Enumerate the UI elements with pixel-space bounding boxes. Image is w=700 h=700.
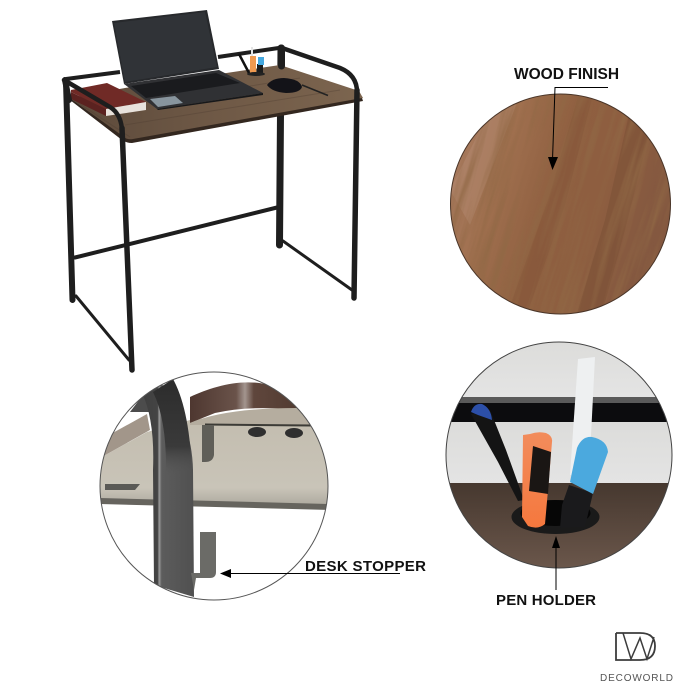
pen cup xyxy=(239,47,265,76)
logo: Decoworld: DECOWORLD xyxy=(600,673,673,684)
callout: wood finish xyxy=(514,66,619,170)
laptop xyxy=(112,10,263,110)
wood edge xyxy=(190,382,300,423)
mouse xyxy=(267,78,328,96)
callout: wood finish: WOOD FINISH xyxy=(514,66,619,83)
callout: pen holder: PEN HOLDER xyxy=(496,592,596,609)
callout: desk stopper xyxy=(220,558,426,578)
logo: Decoworld xyxy=(600,633,673,684)
panel: wood finish circle xyxy=(450,94,671,314)
front frame xyxy=(64,48,357,370)
metal rail xyxy=(205,424,312,426)
panel: desk stopper circle xyxy=(100,372,330,600)
lower stopper xyxy=(191,532,216,590)
callout: desk stopper: DESK STOPPER xyxy=(305,558,426,575)
desk back legs and crossbars xyxy=(66,48,352,360)
holder xyxy=(512,500,600,534)
underside panel xyxy=(100,418,328,504)
screws xyxy=(248,427,266,437)
book xyxy=(71,83,146,116)
desk top xyxy=(70,65,363,143)
panel: pen holder circle xyxy=(445,342,673,569)
grey wedge behind post xyxy=(130,396,149,412)
ruler xyxy=(570,357,595,475)
desk product photo xyxy=(64,10,363,370)
upper bracket xyxy=(202,425,214,462)
callout: pen holder xyxy=(496,536,596,609)
blue marker xyxy=(560,437,608,528)
blue pen xyxy=(471,404,524,501)
desk back rail xyxy=(66,48,282,79)
orange marker xyxy=(522,432,552,528)
post xyxy=(142,382,194,597)
